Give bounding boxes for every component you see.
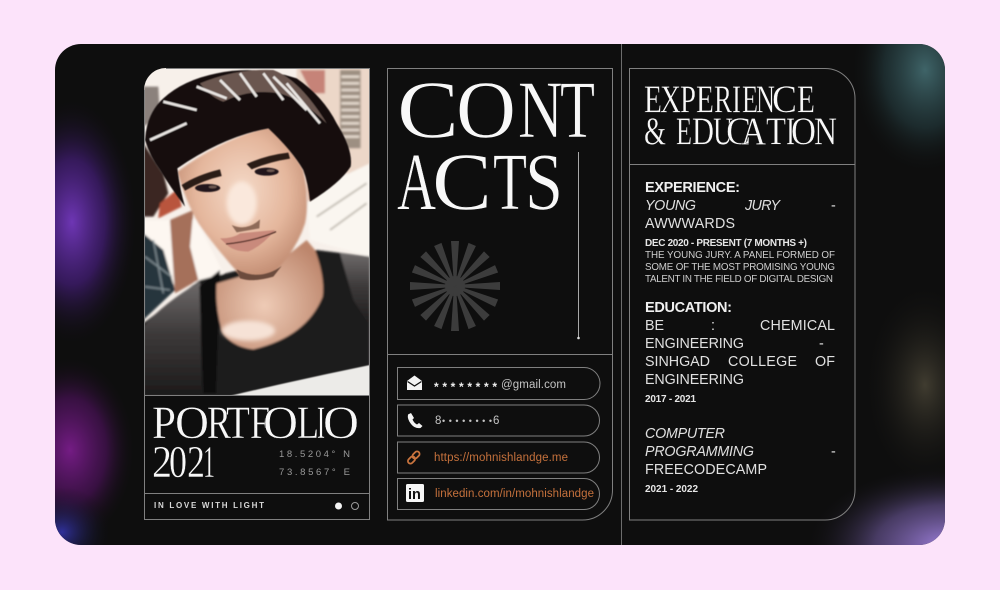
photo: portrait of a young man: [143, 67, 373, 397]
heading: experience and education: R: [714, 78, 732, 121]
text block: experience: YOUNG: [645, 198, 696, 214]
icon: linkedin: in: [408, 487, 421, 503]
text block: education: EDUCATION:: [645, 300, 732, 316]
heading: portfolio: I: [317, 397, 325, 449]
hair: [145, 70, 351, 207]
text block: education: BE: [645, 318, 664, 334]
heading: year: 2: [152, 437, 172, 487]
heading: experience and education: E: [797, 78, 815, 121]
heading: contacts: O: [456, 64, 516, 155]
collarbone highlight: [222, 321, 275, 341]
contact: email: [398, 368, 600, 400]
heading: year: 0: [169, 437, 187, 487]
heading: portfolio: O: [323, 397, 359, 449]
neck: [216, 240, 323, 349]
coordinates: 73.8567° E: [279, 467, 350, 478]
text block: experience: AWWWARDS: [645, 216, 735, 232]
icon: sunburst: [410, 241, 500, 331]
panel outline: [630, 68, 855, 520]
heading: experience and education: P: [680, 78, 696, 121]
heading: experience and education: X: [660, 78, 681, 121]
panel outline: [144, 68, 370, 520]
text block: education: 2017 - 2021: [645, 394, 696, 405]
panel: portfolio: [143, 67, 373, 520]
heading: experience and education: C: [726, 110, 751, 153]
heading: contacts: T: [560, 64, 595, 155]
icon: link: [407, 450, 421, 465]
heading: experience and education: E: [696, 78, 714, 121]
contact: email: @gmail.com: [501, 379, 566, 391]
vertical divider line: [620, 44, 622, 545]
heading: portfolio: P: [152, 397, 176, 449]
white hem bottom right: [227, 365, 370, 397]
beard, mouth, nose: [237, 266, 282, 280]
text block: experience: THE YOUNG JURY. A PANEL FORMED OF: [645, 250, 835, 261]
heading: portfolio: F: [250, 397, 270, 449]
contact: phone: • • • • • • • •: [442, 416, 492, 426]
panel: experience and education: [629, 68, 855, 520]
heading: portfolio: O: [263, 397, 298, 449]
contact: linkedin: [398, 478, 600, 510]
text block: education: FREECODECAMP: [645, 462, 767, 478]
text block: experience: [645, 180, 836, 285]
text block: experience: JURY: [744, 198, 781, 214]
heading: contacts: A: [397, 136, 436, 227]
contact: website: [398, 442, 600, 473]
heading: experience and education: I: [732, 78, 741, 121]
heading: experience and education: N: [814, 110, 837, 153]
text block: education: 2021 - 2022: [645, 484, 698, 495]
icon: phone: [408, 413, 422, 428]
heading: experience and education: I: [786, 110, 795, 153]
pagination dots: [335, 502, 358, 510]
heading: experience and education: E: [742, 78, 758, 121]
text block: experience: -: [831, 198, 836, 214]
text block: education: COMPUTER: [645, 426, 725, 442]
heading: experience and education: C: [772, 78, 797, 121]
contact: phone: 8: [435, 415, 441, 427]
eyes and brows: [182, 169, 222, 191]
text block: education: -: [831, 444, 836, 460]
text block: education: CHEMICAL: [760, 318, 835, 334]
text block: experience: TALENT IN THE FIELD OF DIGITAL DESIGN: [645, 274, 833, 285]
heading: contacts: S: [525, 136, 563, 227]
contact: phone: [398, 405, 600, 436]
text block: education: COLLEGE: [728, 354, 797, 370]
text block: education: ENGINEERING: [645, 336, 744, 352]
heading: year: 1: [203, 437, 215, 487]
text block: education: :: [711, 318, 715, 334]
heading: portfolio: R: [207, 397, 231, 449]
text block: education: OF: [815, 354, 835, 370]
heading: experience and education: &: [644, 110, 666, 153]
text block: education: [645, 300, 836, 495]
heading: contacts: C: [397, 64, 459, 155]
text block: experience: DEC 2020 - PRESENT (7 MONTHS +): [645, 238, 807, 249]
contact: website: https://mohnishlandge.me: [434, 452, 568, 464]
coordinates: [279, 449, 350, 478]
heading: experience and education: [644, 78, 837, 153]
heading: experience and education: N: [756, 78, 775, 121]
heading: experience and education: D: [692, 110, 714, 153]
text block: education: -: [819, 336, 824, 352]
coordinates: 18.5204° N: [279, 449, 350, 460]
heading: year: 2: [187, 437, 205, 487]
ear: [306, 178, 310, 202]
contact: phone: 6: [493, 415, 499, 427]
icon: linkedin: [406, 484, 424, 503]
contact: linkedin: linkedin.com/in/mohnishlandge: [435, 488, 594, 500]
shirt and backpack: [143, 250, 370, 397]
text block: education: ENGINEERING: [645, 372, 744, 388]
heading: experience and education: T: [766, 110, 786, 153]
heading: experience and education: O: [791, 110, 816, 153]
nose highlight: [227, 182, 257, 225]
heading: experience and education: E: [644, 78, 662, 121]
tagline: IN LOVE WITH LIGHT: [154, 501, 264, 510]
dark card background with colour glows: [55, 44, 945, 545]
panel: contacts: [387, 64, 613, 520]
contact: email: * * * * * * * *: [434, 380, 497, 394]
heading: contacts: T: [493, 136, 527, 227]
heading: portfolio: L: [297, 397, 319, 449]
heading: experience and education: E: [676, 110, 692, 153]
heading: experience and education: A: [741, 110, 766, 153]
heading: portfolio: T: [226, 397, 250, 449]
face: [177, 127, 307, 279]
heading: contacts: N: [518, 64, 563, 155]
heading: contacts: C: [432, 136, 492, 227]
text block: experience: SOME OF THE MOST PROMISING YOUNG: [645, 262, 835, 273]
text block: experience: EXPERIENCE:: [645, 180, 740, 196]
vertical line with end dot: [577, 152, 580, 339]
text block: education: SINHGAD: [645, 354, 710, 370]
text block: education: PROGRAMMING: [645, 444, 754, 460]
heading: contacts: [397, 64, 595, 227]
heading: experience and education: U: [713, 110, 733, 153]
heading: portfolio: O: [175, 397, 209, 449]
icon: envelope: [407, 376, 422, 390]
panel outline: [388, 68, 612, 520]
